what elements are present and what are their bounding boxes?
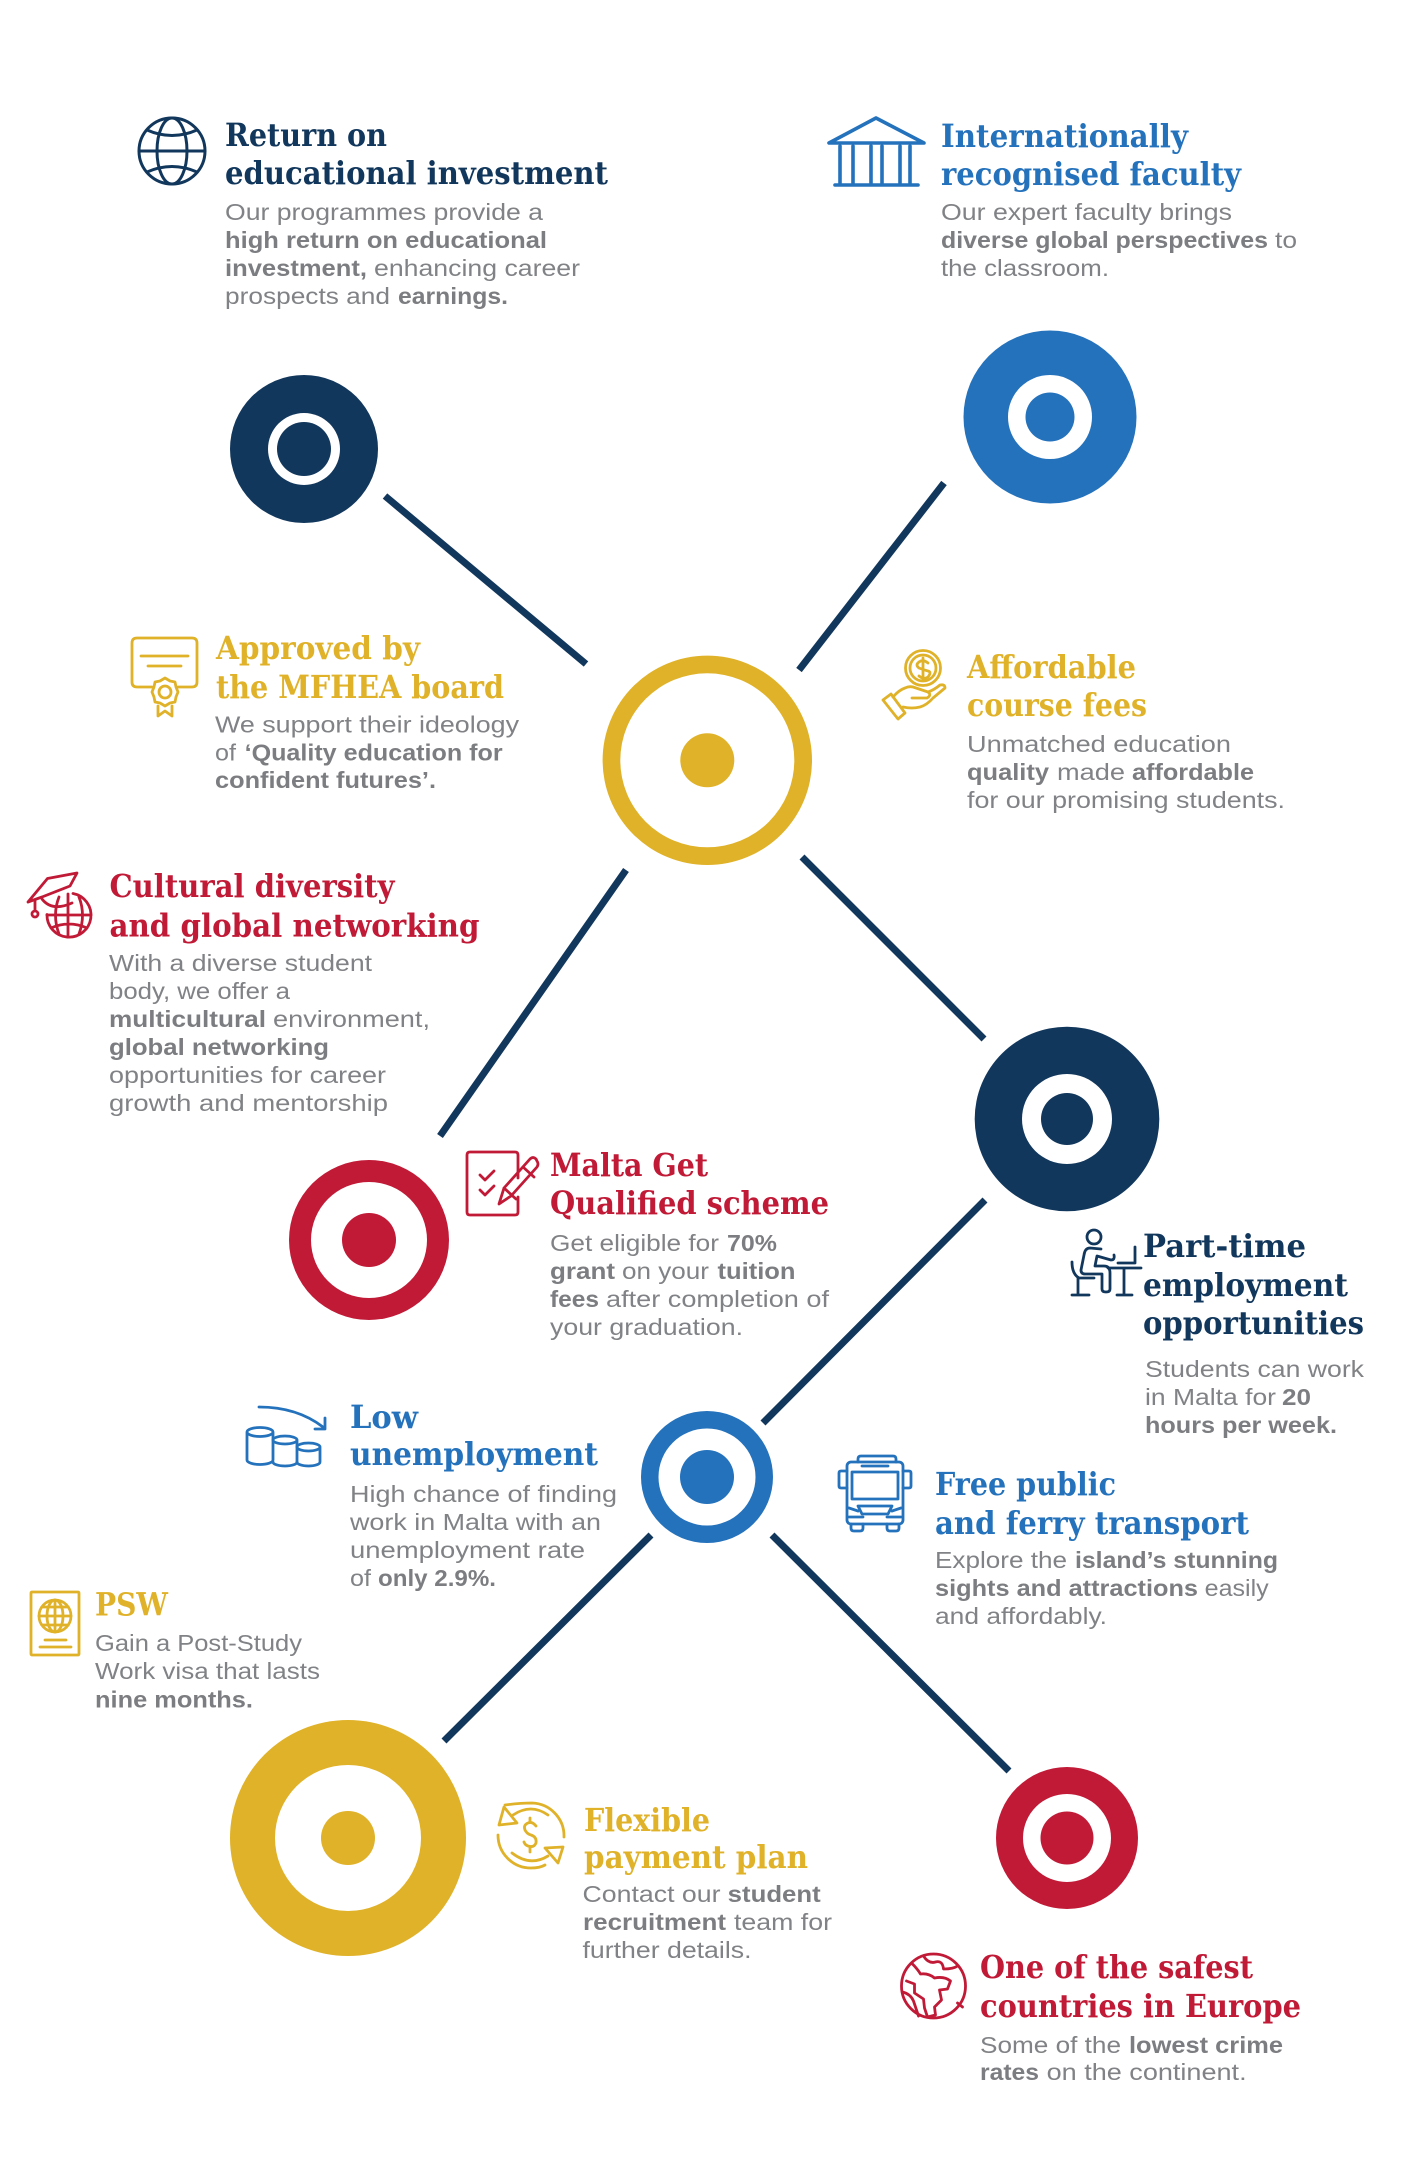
body text: grant	[550, 1258, 615, 1284]
heading: Free public	[935, 1466, 1116, 1503]
body text: nine months.	[95, 1686, 253, 1712]
panel: return on educational investment	[139, 117, 608, 309]
heading	[966, 649, 1147, 724]
body text: rates	[980, 2059, 1039, 2085]
body text	[935, 1547, 1278, 1629]
body text: of	[215, 740, 237, 766]
heading: payment plan	[584, 1839, 808, 1876]
body text	[941, 199, 1297, 281]
heading: Return on	[225, 117, 387, 154]
body text: body, we offer a	[109, 978, 290, 1004]
heading	[941, 118, 1243, 193]
circle: blue middle	[641, 1411, 773, 1543]
connector lines	[385, 483, 1009, 1771]
panel: Malta Get Qualified scheme	[467, 1147, 830, 1340]
body text: lowest crime	[1129, 2032, 1283, 2058]
body text: investment,	[225, 255, 367, 281]
body text: multicultural	[109, 1006, 266, 1032]
body text: confident futures’.	[215, 767, 436, 793]
heading: and ferry transport	[935, 1505, 1249, 1542]
heading	[1143, 1228, 1364, 1342]
heading: Cultural diversity	[110, 868, 396, 905]
icon: earth	[902, 1954, 966, 2018]
body text: Work visa that lasts	[95, 1658, 320, 1684]
body text: prospects and	[225, 283, 390, 309]
icon: globe	[139, 118, 205, 184]
heading: Qualified scheme	[550, 1185, 829, 1222]
body text: Gain a Post-Study	[95, 1630, 303, 1656]
heading: Internationally	[941, 118, 1190, 155]
panel: low unemployment	[247, 1399, 617, 1591]
body text: With a diverse student	[109, 950, 373, 976]
panel: approved by the MFHEA board	[132, 630, 520, 793]
body text: for our promising students.	[967, 787, 1285, 813]
heading: unemployment	[350, 1436, 598, 1473]
icon: bus	[839, 1456, 911, 1531]
body text	[349, 1481, 617, 1591]
panel: cultural diversity and global networking	[28, 868, 480, 1116]
body text: unemployment rate	[350, 1537, 585, 1563]
body text: Students can work	[1145, 1356, 1365, 1382]
heading: Affordable	[966, 649, 1136, 686]
panel: internationally recognised faculty	[829, 118, 1297, 281]
heading	[225, 117, 608, 192]
body text	[582, 1881, 832, 1963]
heading: the MFHEA board	[216, 669, 504, 706]
icon: certificate	[132, 638, 197, 716]
body text: environment,	[273, 1006, 430, 1032]
body text: affordable	[1132, 759, 1254, 785]
panel: one of the safest countries in Europe	[902, 1949, 1301, 2085]
body text: of	[350, 1565, 372, 1591]
heading: and global networking	[110, 908, 480, 944]
body text: your graduation.	[550, 1314, 743, 1340]
body text	[95, 1630, 320, 1712]
heading: employment	[1143, 1267, 1348, 1304]
circle: navy right	[975, 1027, 1159, 1211]
icon: dollar exchange arrows	[498, 1803, 564, 1868]
heading	[110, 868, 480, 944]
heading: Flexible	[584, 1802, 710, 1839]
icon: falling coin stacks	[247, 1407, 325, 1466]
body text: growth and mentorship	[109, 1090, 388, 1116]
panel: free public and ferry transport	[839, 1456, 1278, 1629]
body text: 70%	[727, 1230, 777, 1256]
panel: affordable course fees	[883, 649, 1285, 813]
body text: diverse global perspectives	[941, 227, 1268, 253]
heading: Part-time	[1143, 1228, 1306, 1265]
body text: ‘Quality education for	[245, 740, 503, 766]
icon: passport	[31, 1592, 79, 1655]
body text: We support their ideology	[215, 712, 520, 738]
circle: red left	[289, 1160, 449, 1320]
heading: educational investment	[225, 155, 608, 192]
body text: recruitment	[583, 1909, 726, 1935]
body text: made	[1057, 759, 1125, 785]
body text: easily	[1205, 1575, 1269, 1601]
body text: quality	[967, 759, 1049, 785]
circle: navy top	[230, 375, 378, 523]
heading	[584, 1802, 808, 1876]
panel: part-time employment opportunities	[1072, 1228, 1365, 1438]
body text: on your	[622, 1258, 709, 1284]
body text: opportunities for career	[109, 1062, 386, 1088]
body text: on the continent.	[1047, 2059, 1247, 2085]
heading: course fees	[967, 687, 1147, 724]
body text: team for	[734, 1909, 832, 1935]
body text: Unmatched education	[967, 731, 1231, 757]
body text: enhancing career	[374, 255, 580, 281]
body text: to	[1275, 227, 1297, 253]
body text: in Malta for	[1145, 1384, 1276, 1410]
heading	[550, 1147, 829, 1222]
body text	[225, 199, 580, 309]
heading	[935, 1466, 1249, 1542]
body text: student	[728, 1881, 821, 1907]
icon: graduation cap and globe	[28, 873, 91, 937]
body text	[980, 2032, 1283, 2085]
icon: person at desk	[1072, 1230, 1141, 1295]
circle: blue top	[964, 330, 1136, 504]
circle: yellow bottom	[230, 1720, 466, 1956]
body text: High chance of finding	[350, 1481, 617, 1507]
circle: yellow centre	[603, 656, 812, 865]
icon: institution building	[829, 118, 924, 185]
body text: work in Malta with an	[349, 1509, 601, 1535]
body text: Contact our	[582, 1881, 721, 1907]
body text: tuition	[718, 1258, 796, 1284]
heading: recognised faculty	[941, 156, 1243, 193]
heading: Approved by	[215, 630, 422, 667]
body text: Our programmes provide a	[225, 199, 543, 225]
icon: checklist and pencil	[467, 1152, 538, 1215]
circle: red bottom	[996, 1767, 1138, 1909]
body text	[215, 712, 520, 793]
heading: One of the safest	[980, 1949, 1253, 1986]
body text	[550, 1230, 830, 1340]
heading: Malta Get	[550, 1147, 708, 1184]
body text: island’s stunning	[1075, 1547, 1278, 1573]
body text	[109, 950, 430, 1116]
body text: earnings.	[398, 283, 508, 309]
body text: Our expert faculty brings	[941, 199, 1232, 225]
heading: PSW	[95, 1587, 169, 1624]
body text	[967, 731, 1285, 813]
heading	[980, 1949, 1301, 2025]
heading	[215, 630, 504, 706]
panel: flexible payment plan	[498, 1802, 832, 1963]
body text: Some of the	[980, 2032, 1121, 2058]
body text: high return on educational	[225, 227, 547, 253]
body text: further details.	[582, 1937, 752, 1963]
body text: the classroom.	[941, 255, 1109, 281]
body text: fees	[550, 1286, 599, 1312]
heading: opportunities	[1143, 1305, 1364, 1342]
body text: sights and attractions	[935, 1575, 1198, 1601]
body text	[1145, 1356, 1365, 1438]
body text: after completion of	[606, 1286, 830, 1312]
body text: global networking	[109, 1034, 329, 1060]
body text: hours per week.	[1145, 1412, 1337, 1438]
heading: countries in Europe	[980, 1988, 1301, 2025]
body text: 20	[1282, 1384, 1311, 1410]
body text: and affordably.	[935, 1603, 1107, 1629]
heading	[350, 1399, 598, 1473]
icon: hand holding coin	[883, 650, 945, 719]
heading: Low	[350, 1399, 419, 1436]
body text: Explore the	[935, 1547, 1067, 1573]
panel: PSW	[31, 1587, 320, 1712]
body text: Get eligible for	[550, 1230, 719, 1256]
body text: only 2.9%.	[378, 1565, 496, 1591]
